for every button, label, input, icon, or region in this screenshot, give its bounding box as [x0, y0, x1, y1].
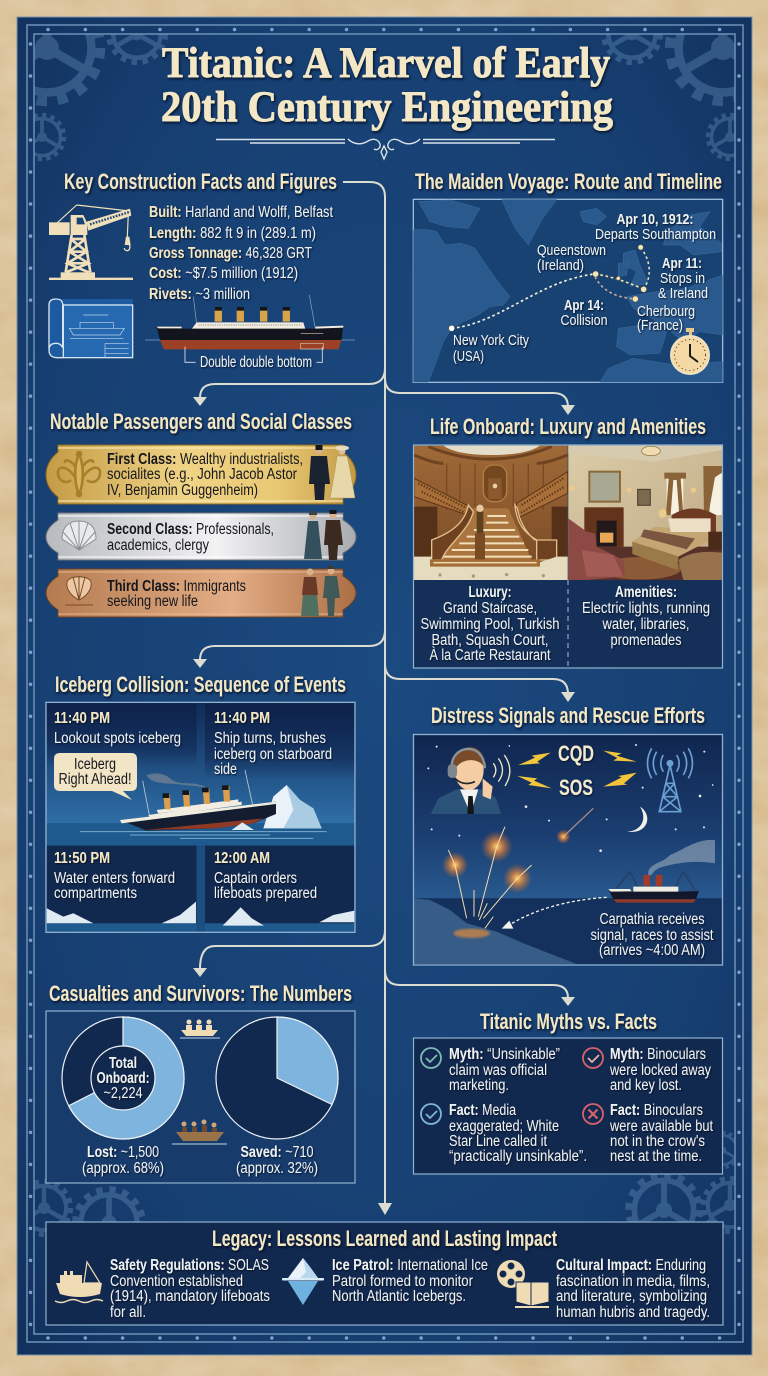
text: myth 2 [609, 1046, 711, 1094]
timeline text: 11:40 PM [54, 710, 110, 727]
caption panel: promenades [610, 632, 682, 649]
text: cultural impact: fascination in media, films, [556, 1273, 710, 1290]
third class plate [46, 566, 356, 617]
icon: bronze shell [65, 576, 93, 605]
icon: myth check [421, 1048, 441, 1068]
icon: fact cross [583, 1104, 603, 1124]
heading: passengers: Notable Passengers and Social Classes [50, 409, 352, 434]
text: safety regulations: Convention established [110, 1273, 243, 1290]
caption panel [414, 445, 722, 668]
text: fact 1: Fact: Media [449, 1102, 516, 1119]
panel: passengers and classes [46, 409, 356, 617]
text: fact 2: nest at the time. [610, 1148, 702, 1165]
map labels: Cherbourg [637, 303, 695, 320]
text: fact 1: exaggerated; White [449, 1118, 559, 1135]
icon: radio tower [647, 748, 692, 812]
carpathia caption: signal, races to assist [590, 927, 714, 944]
text: fact 1: “practically unsinkable”. [449, 1148, 587, 1165]
text: safety regulations: Safety Regulations: SOLAS [110, 1257, 269, 1274]
icon: ship [55, 1262, 103, 1302]
text: myth 1: Myth: “Unsinkable” [449, 1046, 560, 1063]
timeline text: side [214, 761, 237, 778]
timeline text: Ship turns, brushes [214, 730, 326, 747]
facts list: Rivets: ~3 million [149, 286, 250, 303]
caption panel: Grand Staircase, [443, 600, 537, 617]
icon: gold fleur [58, 452, 100, 496]
chart: lost donut: Onboard: [96, 1070, 150, 1087]
third class plate: Third Class: Immigrants [107, 578, 246, 595]
facts list: Length: 882 ft 9 in (289.1 m) [149, 225, 316, 242]
heading: iceberg collision: Iceberg Collision: Sequence of Events [55, 672, 346, 697]
chart labels: (approx. 32%) [236, 1160, 318, 1177]
chart labels [82, 1144, 318, 1177]
title ornament [216, 139, 555, 159]
text: fact 1 [449, 1102, 587, 1165]
text: safety regulations [110, 1257, 270, 1321]
map labels: Apr 11: [662, 255, 702, 272]
text: fact 1: Star Line called it [449, 1133, 548, 1150]
text: cultural impact: and literature, symbolizing [556, 1288, 707, 1305]
heading: casualties: Casualties and Survivors: The Numbers [49, 981, 352, 1006]
connector arrows [193, 182, 575, 1215]
text: fact 2: Fact: Binoculars [610, 1102, 703, 1119]
icon: blueprint scroll [49, 299, 133, 358]
caption panel: Amenities: [615, 584, 677, 601]
carpathia caption: Carpathia receives [600, 911, 705, 928]
caption panel: water, libraries, [602, 616, 690, 633]
text: myth 1: marketing. [449, 1077, 509, 1094]
map labels: Collision [560, 312, 608, 329]
text: myth 2: were locked away [609, 1062, 711, 1079]
figure: radio operator [431, 747, 510, 814]
map labels [453, 211, 716, 365]
callout: iceberg right ahead: Right Ahead! [58, 771, 132, 788]
text: ice patrol: Patrol formed to monitor [332, 1273, 473, 1290]
text: safety regulations: for all. [110, 1304, 146, 1321]
panel: distress signals [414, 703, 723, 965]
text: fact 2 [609, 1102, 714, 1165]
panel: legacy [46, 1222, 723, 1325]
label: double bottom: Double double bottom [200, 354, 312, 371]
panel: myths vs facts [414, 1009, 722, 1174]
map labels: Apr 10, 1912: [616, 211, 694, 228]
map labels: & Ireland [658, 285, 708, 302]
route map [413, 199, 723, 382]
second class plate [46, 510, 356, 560]
third class plate: seeking new life [107, 593, 198, 610]
caption panel: Swimming Pool, Turkish [420, 616, 560, 633]
first class plate: IV, Benjamin Guggenheim) [107, 482, 258, 499]
icon: crescent moon [627, 807, 647, 832]
signal labels: CQD [558, 741, 594, 766]
map labels: (USA) [453, 348, 484, 365]
icon: silver shell [62, 521, 96, 550]
icon: dockyard crane [49, 205, 133, 280]
text: ice patrol: Ice Patrol: International Ice [332, 1257, 488, 1274]
carpathia caption [590, 911, 714, 959]
heading: legacy: Legacy: Lessons Learned and Lasting Impact [212, 1226, 557, 1251]
signal labels: SOS [559, 775, 593, 800]
facts list [149, 204, 334, 303]
icon: myth mark [583, 1048, 603, 1068]
text: cultural impact: human hubris and tragedy. [556, 1304, 710, 1321]
second class plate: academics, clergy [107, 537, 209, 554]
panel: iceberg collision [46, 672, 355, 932]
timeline text: Water enters forward [54, 870, 175, 887]
caption panel: Luxury: [468, 584, 512, 601]
title: Titanic: A Marvel of Early [162, 40, 610, 87]
first class plate [46, 445, 356, 504]
facts list: Gross Tonnage: 46,328 GRT [149, 245, 312, 262]
text: ice patrol [332, 1257, 488, 1305]
facts list: Built: Harland and Wolff, Belfast [149, 204, 334, 221]
panel: key construction facts [49, 169, 355, 371]
timeline text: lifeboats prepared [214, 885, 317, 902]
chart: saved pie [216, 1017, 338, 1139]
text: fact 2: were available but [609, 1118, 714, 1135]
text: fact 2: not in the crow's [610, 1133, 705, 1150]
photo: grand staircase [414, 446, 568, 580]
callout: iceberg right ahead [54, 753, 137, 800]
icon: lightning bolts [517, 751, 637, 788]
panel: maiden voyage [413, 169, 723, 382]
text: cultural impact [556, 1257, 710, 1321]
caption panel: Bath, Squash Court, [432, 632, 548, 649]
caption panel: À la Carte Restaurant [430, 647, 551, 664]
text: myth 1 [449, 1046, 560, 1094]
first class plate: First Class: Wealthy industrialists, [107, 451, 303, 468]
text: ice patrol: North Atlantic Icebergs. [332, 1288, 466, 1305]
chart: lost donut [62, 1017, 184, 1139]
first class plate: socialites (e.g., John Jacob Astor [107, 466, 297, 483]
callout: iceberg right ahead: Iceberg [74, 756, 116, 773]
carpathia caption: (arrives ~4:00 AM) [599, 942, 705, 959]
timeline text: 11:40 PM [214, 710, 270, 727]
signal labels [558, 741, 594, 800]
figures: first class couple [309, 445, 355, 500]
map labels: Stops in [660, 270, 705, 287]
icon: full lifeboat [180, 1020, 220, 1038]
map labels: Apr 14: [564, 297, 604, 314]
icon: fact check [421, 1104, 441, 1124]
icon: iceberg [282, 1258, 324, 1305]
chart labels: Lost: ~1,500 [87, 1144, 159, 1161]
text: cultural impact: Cultural Impact: Enduring [556, 1257, 706, 1274]
timeline text: iceberg on starboard [214, 746, 332, 763]
map labels: (Ireland) [537, 257, 584, 274]
map labels: Queenstown [537, 242, 606, 259]
icon: crowded lifeboat [172, 1120, 227, 1144]
heading: key construction: Key Construction Facts and Figures [64, 169, 337, 194]
panel: casualties and survivors [46, 981, 355, 1183]
icon: film reel and book [497, 1260, 549, 1307]
chart labels: (approx. 68%) [82, 1160, 164, 1177]
title: 20th Century Engineering [161, 84, 613, 131]
figures: third class couple [301, 566, 340, 616]
decorative gears [34, 34, 734, 1237]
chart labels: Saved: ~710 [240, 1144, 314, 1161]
timeline text [54, 710, 332, 902]
map labels: New York City [453, 332, 529, 349]
timeline text: compartments [54, 885, 137, 902]
timeline text: 12:00 AM [214, 850, 270, 867]
night scene [414, 735, 723, 964]
heading: myths: Titanic Myths vs. Facts [480, 1009, 657, 1034]
map labels: (France) [637, 317, 683, 334]
map labels: Departs Southampton [595, 226, 716, 243]
title [161, 40, 613, 131]
timeline text: Lookout spots iceberg [54, 730, 181, 747]
text: myth 1: claim was official [449, 1062, 547, 1079]
flares and meteor [442, 808, 593, 938]
photo: first class bedroom [568, 446, 722, 580]
facts list: Cost: ~$7.5 million (1912) [149, 265, 298, 282]
timeline text: 11:50 PM [54, 850, 110, 867]
text: safety regulations: (1914), mandatory lifeboats [110, 1288, 270, 1305]
timeline text: Captain orders [214, 870, 297, 887]
rescue ship [502, 840, 715, 929]
chart: lost donut: Total [109, 1055, 137, 1072]
text: myth 2: Myth: Binoculars [610, 1046, 706, 1063]
collision scene [46, 702, 355, 932]
figures: second class couple [304, 510, 343, 560]
second class plate: Second Class: Professionals, [107, 521, 274, 538]
ship cross-section [145, 295, 355, 362]
icon: stopwatch [671, 328, 709, 374]
text: myth 2: and key lost. [610, 1077, 682, 1094]
chart: lost donut: ~2,224 [104, 1085, 143, 1102]
panel: life onboard [414, 414, 722, 668]
caption panel: Electric lights, running [582, 600, 710, 617]
